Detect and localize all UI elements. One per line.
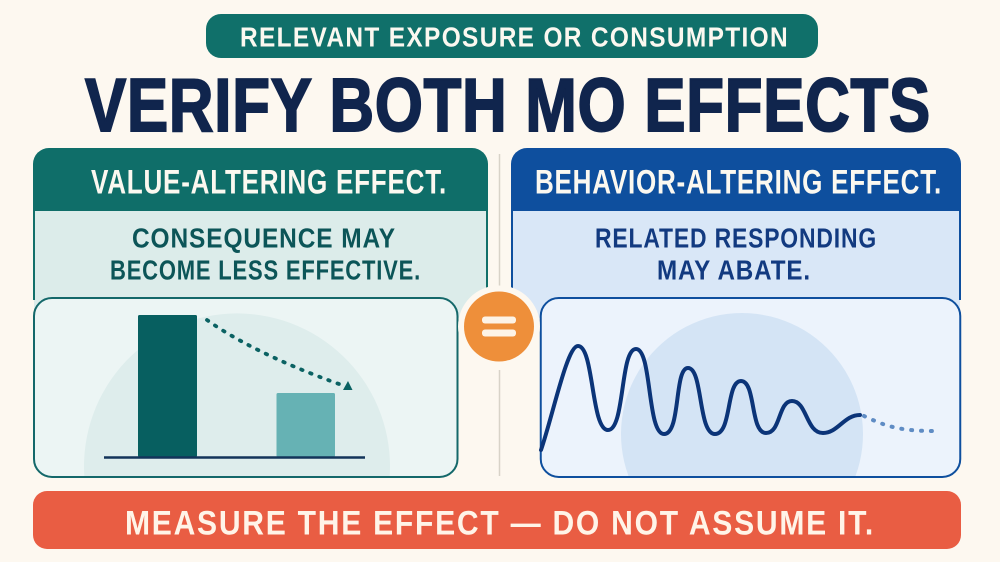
chart: damped wave bbox=[541, 298, 960, 477]
center divider line bbox=[498, 154, 500, 476]
text: consequence may become less effective: BECOME LESS EFFECTIVE. bbox=[110, 254, 421, 286]
top label pill: RELEVANT EXPOSURE OR CONSUMPTION bbox=[240, 22, 789, 52]
panel header: behavior-altering bbox=[511, 148, 961, 211]
panel: value-altering effect bbox=[33, 148, 488, 477]
heading: value-altering effect: VALUE-ALTERING EFFECT. bbox=[91, 164, 447, 202]
dotted tail bbox=[864, 416, 933, 431]
text: related responding may abate: MAY ABATE. bbox=[657, 254, 811, 286]
tall bar bbox=[138, 315, 197, 457]
text: related responding may abate bbox=[595, 222, 877, 286]
background semicircle bbox=[84, 313, 390, 476]
text: consequence may become less effective: CONSEQUENCE MAY bbox=[132, 222, 396, 254]
panel: behavior-altering effect bbox=[511, 148, 961, 477]
wave line bbox=[541, 346, 860, 450]
panel body: value-altering bbox=[34, 200, 487, 318]
panel body: behavior-altering bbox=[512, 200, 960, 318]
top label pill bbox=[206, 14, 818, 58]
bottom banner: MEASURE THE EFFECT — DO NOT ASSUME IT. bbox=[125, 504, 875, 542]
text: consequence may become less effective bbox=[110, 222, 421, 286]
equals badge bbox=[458, 286, 540, 368]
short bar bbox=[276, 393, 335, 457]
chart: declining bars bbox=[34, 298, 458, 477]
dotted arrow bbox=[207, 320, 352, 390]
baseline bbox=[104, 456, 365, 459]
bottom banner bbox=[33, 491, 961, 549]
text: related responding may abate: RELATED RESPONDING bbox=[595, 222, 877, 254]
panel header: value-altering bbox=[33, 148, 488, 211]
background circle bbox=[621, 313, 863, 476]
